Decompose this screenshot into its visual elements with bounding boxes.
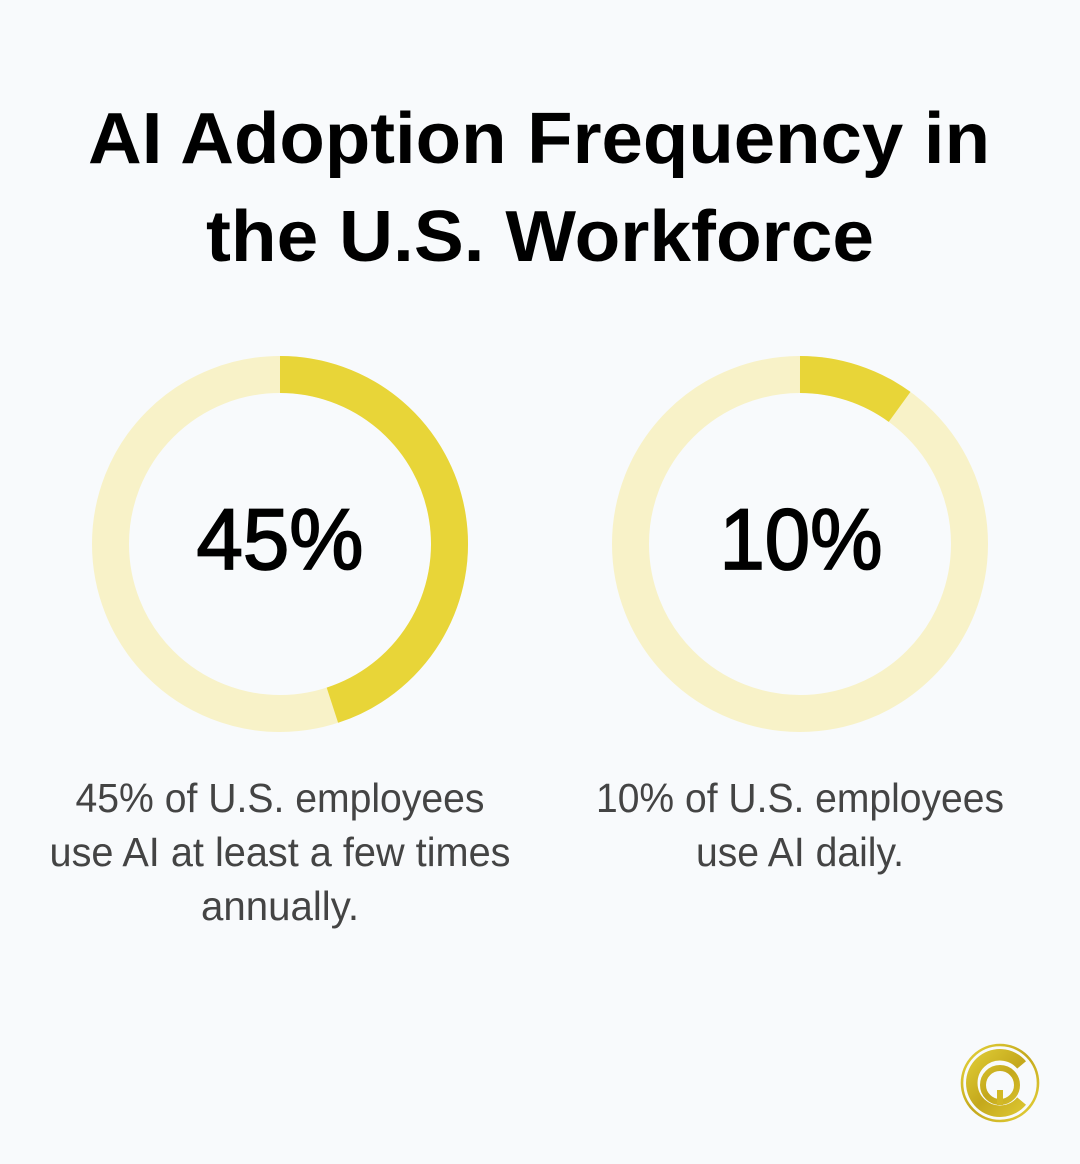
icon: gold CQ logo	[962, 1045, 1038, 1121]
donut track: 10 percent	[630, 374, 970, 714]
donut value arc: 45 percent	[280, 374, 450, 705]
stat: 45%: 45%	[196, 492, 364, 588]
caption: 45 percent	[50, 775, 510, 929]
donut track: 45 percent	[110, 374, 450, 714]
caption: 10 percent: 10% of U.S. employees	[596, 775, 1004, 821]
title: the U.S. Workforce	[206, 197, 874, 277]
title	[88, 99, 990, 277]
stat: 10%: 10%	[720, 492, 882, 588]
caption: 45 percent: use AI at least a few times	[50, 829, 510, 875]
caption: 10 percent: use AI daily.	[696, 829, 904, 875]
caption: 45 percent: 45% of U.S. employees	[76, 775, 484, 821]
donut value arc: 10 percent	[800, 374, 900, 407]
panel: 45 percent donut	[110, 374, 450, 714]
caption: 45 percent: annually.	[201, 883, 359, 929]
panel: 10 percent donut	[630, 374, 970, 714]
title: AI Adoption Frequency in	[88, 99, 990, 179]
caption: 10 percent	[596, 775, 1004, 875]
